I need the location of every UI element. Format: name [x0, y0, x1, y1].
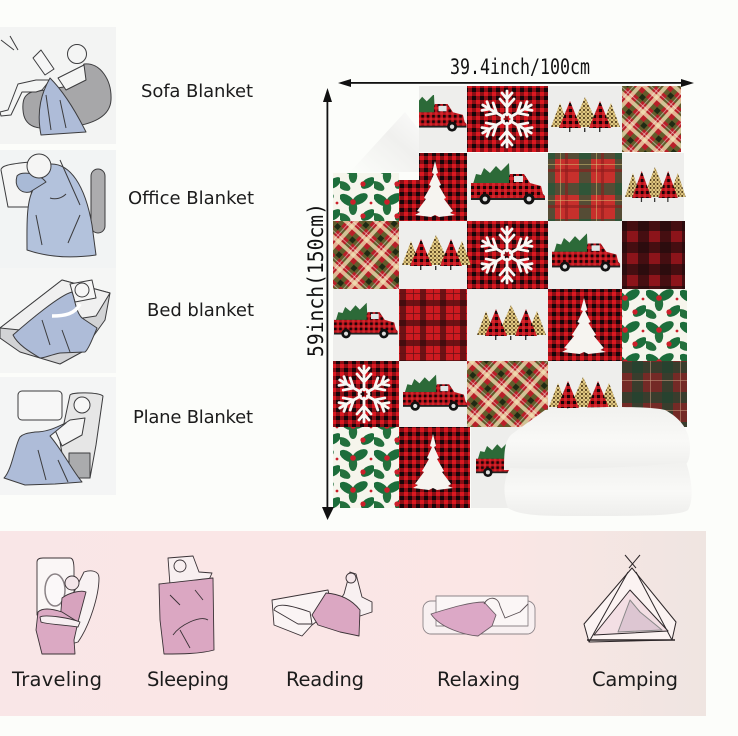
- camping label: Camping: [592, 668, 678, 691]
- arrow: height: [322, 88, 334, 520]
- row 5 cells: [333, 361, 687, 427]
- icon: sleeping: [159, 556, 214, 654]
- row 1 cells: [399, 86, 681, 152]
- white tree motifs: [413, 161, 606, 490]
- row 2 cells: [333, 153, 684, 221]
- tree group motifs: [402, 97, 686, 412]
- bed blanket label: Bed blanket: [147, 300, 254, 321]
- folded corner: [333, 86, 419, 180]
- icon: relaxing: [423, 596, 535, 636]
- sleeping label: Sleeping: [147, 668, 229, 691]
- traveling label: Traveling: [11, 668, 102, 691]
- icon: person in bed: [0, 280, 110, 364]
- panel: plane blanket: [0, 377, 253, 495]
- plane blanket label: Plane Blanket: [133, 407, 253, 428]
- icon: reading: [272, 572, 372, 636]
- row 4 cells: [333, 289, 687, 361]
- relaxing label: Relaxing: [437, 668, 520, 691]
- blanket photo: [333, 86, 692, 516]
- icon: traveling: [36, 558, 99, 654]
- snowflake motifs: [336, 91, 535, 422]
- panel: office blanket: [0, 150, 254, 268]
- row 6 cells: [333, 427, 601, 508]
- height label: 59inch(150cm): [304, 203, 328, 357]
- icon: person in plane seat: [4, 391, 103, 485]
- icon: person at desk: [1, 154, 105, 257]
- icon: camping tent: [584, 555, 676, 642]
- reading label: Reading: [286, 668, 364, 691]
- fold shadow: [350, 112, 419, 172]
- panel: usage scenarios: [0, 531, 706, 716]
- arrow: width: [338, 79, 694, 87]
- panel: sofa blanket: [0, 27, 253, 144]
- panel: bed blanket: [0, 268, 254, 373]
- row 3 cells: [333, 221, 685, 289]
- office blanket label: Office Blanket: [128, 188, 254, 209]
- sofa blanket label: Sofa Blanket: [141, 81, 253, 102]
- folded blanket: [504, 407, 692, 516]
- width label: 39.4inch/100cm: [450, 55, 590, 79]
- icon: person reading on sofa: [0, 36, 111, 135]
- truck motifs: [334, 94, 620, 477]
